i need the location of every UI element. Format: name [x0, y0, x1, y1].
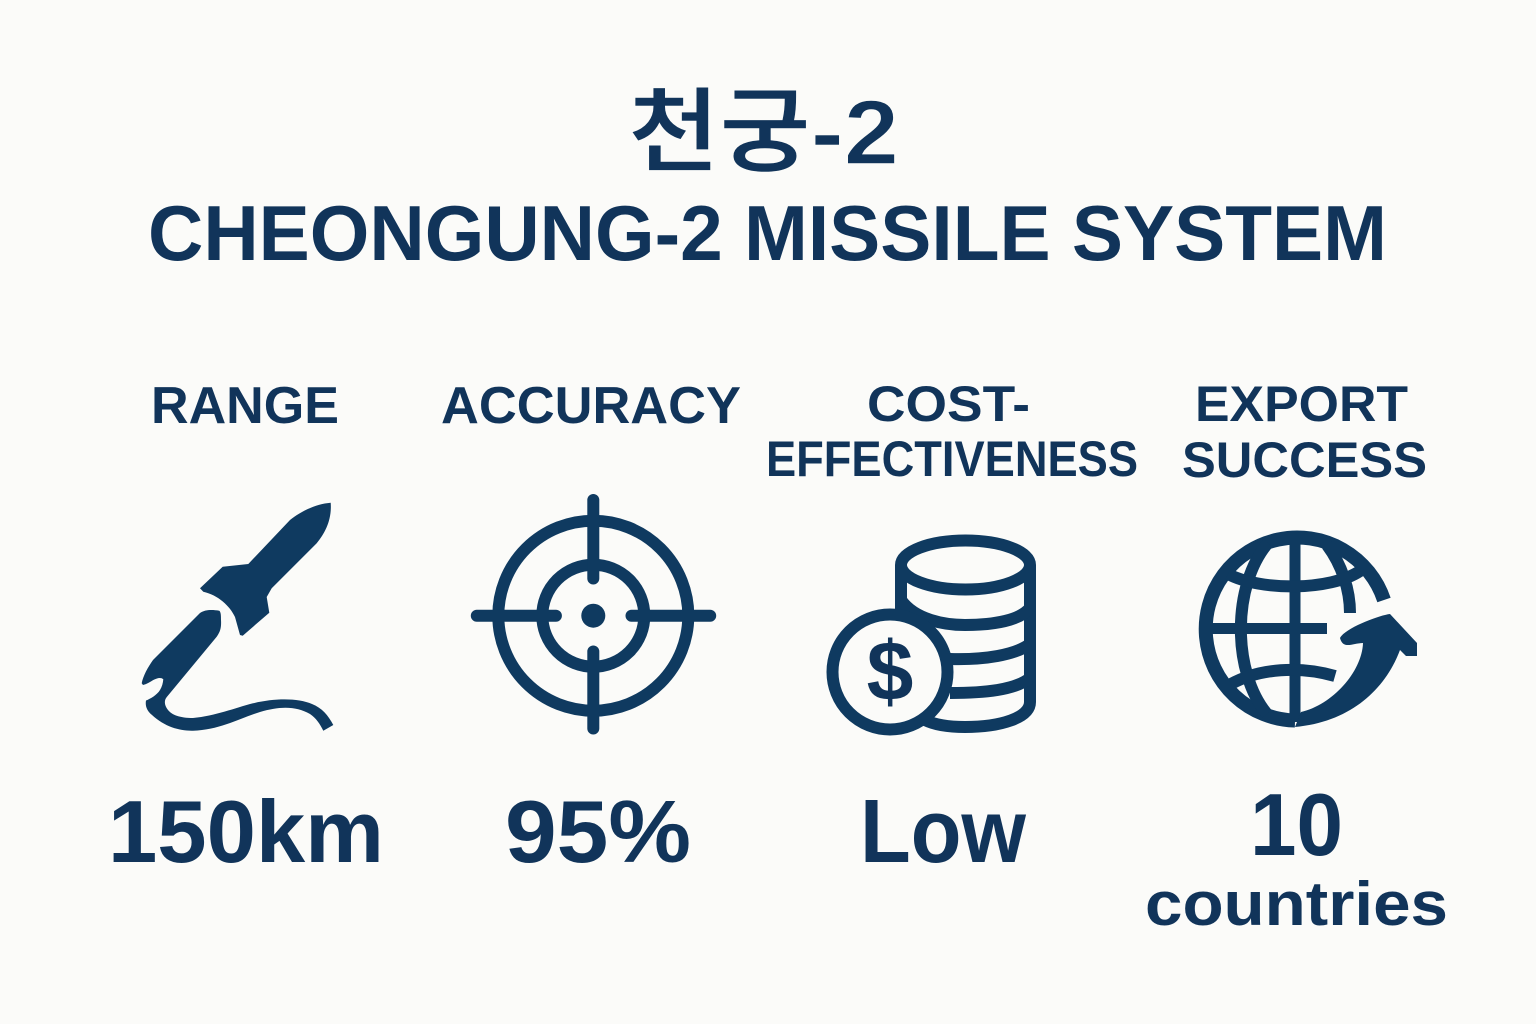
- column: range: [108, 377, 384, 881]
- value: range: 150km: [108, 782, 384, 881]
- title: English: CHEONGUNG-2 MISSILE SYSTEM: [148, 189, 1387, 277]
- value: export count: 10: [1250, 775, 1343, 874]
- heading: range: RANGE: [151, 377, 339, 435]
- heading: cost-effectiveness: [766, 376, 1138, 487]
- icon: missile with trail: [142, 503, 333, 731]
- column: accuracy: [441, 377, 741, 881]
- heading: cost-effectiveness: COST-: [867, 376, 1030, 432]
- heading: accuracy: ACCURACY: [441, 377, 741, 435]
- column: export success: [1145, 376, 1448, 939]
- title: Korean: 천궁-2: [628, 82, 899, 184]
- icon glyph: dollar sign: $: [867, 624, 913, 718]
- heading: export success: [1182, 376, 1427, 488]
- heading: export success: SUCCESS: [1182, 432, 1427, 488]
- icon: crosshair target: [477, 500, 710, 728]
- column: cost-effectiveness: [766, 376, 1138, 882]
- value: accuracy: 95%: [505, 782, 691, 881]
- value: export count: [1145, 775, 1448, 939]
- value: export count: countries: [1145, 870, 1448, 939]
- value: cost-effectiveness: Low: [860, 782, 1027, 882]
- heading: cost-effectiveness: EFFECTIVENESS: [766, 431, 1138, 487]
- icon: coin stack with dollar coin: [832, 540, 1030, 730]
- heading: export success: EXPORT: [1195, 376, 1408, 432]
- icon: globe with export arrow: [1206, 537, 1417, 727]
